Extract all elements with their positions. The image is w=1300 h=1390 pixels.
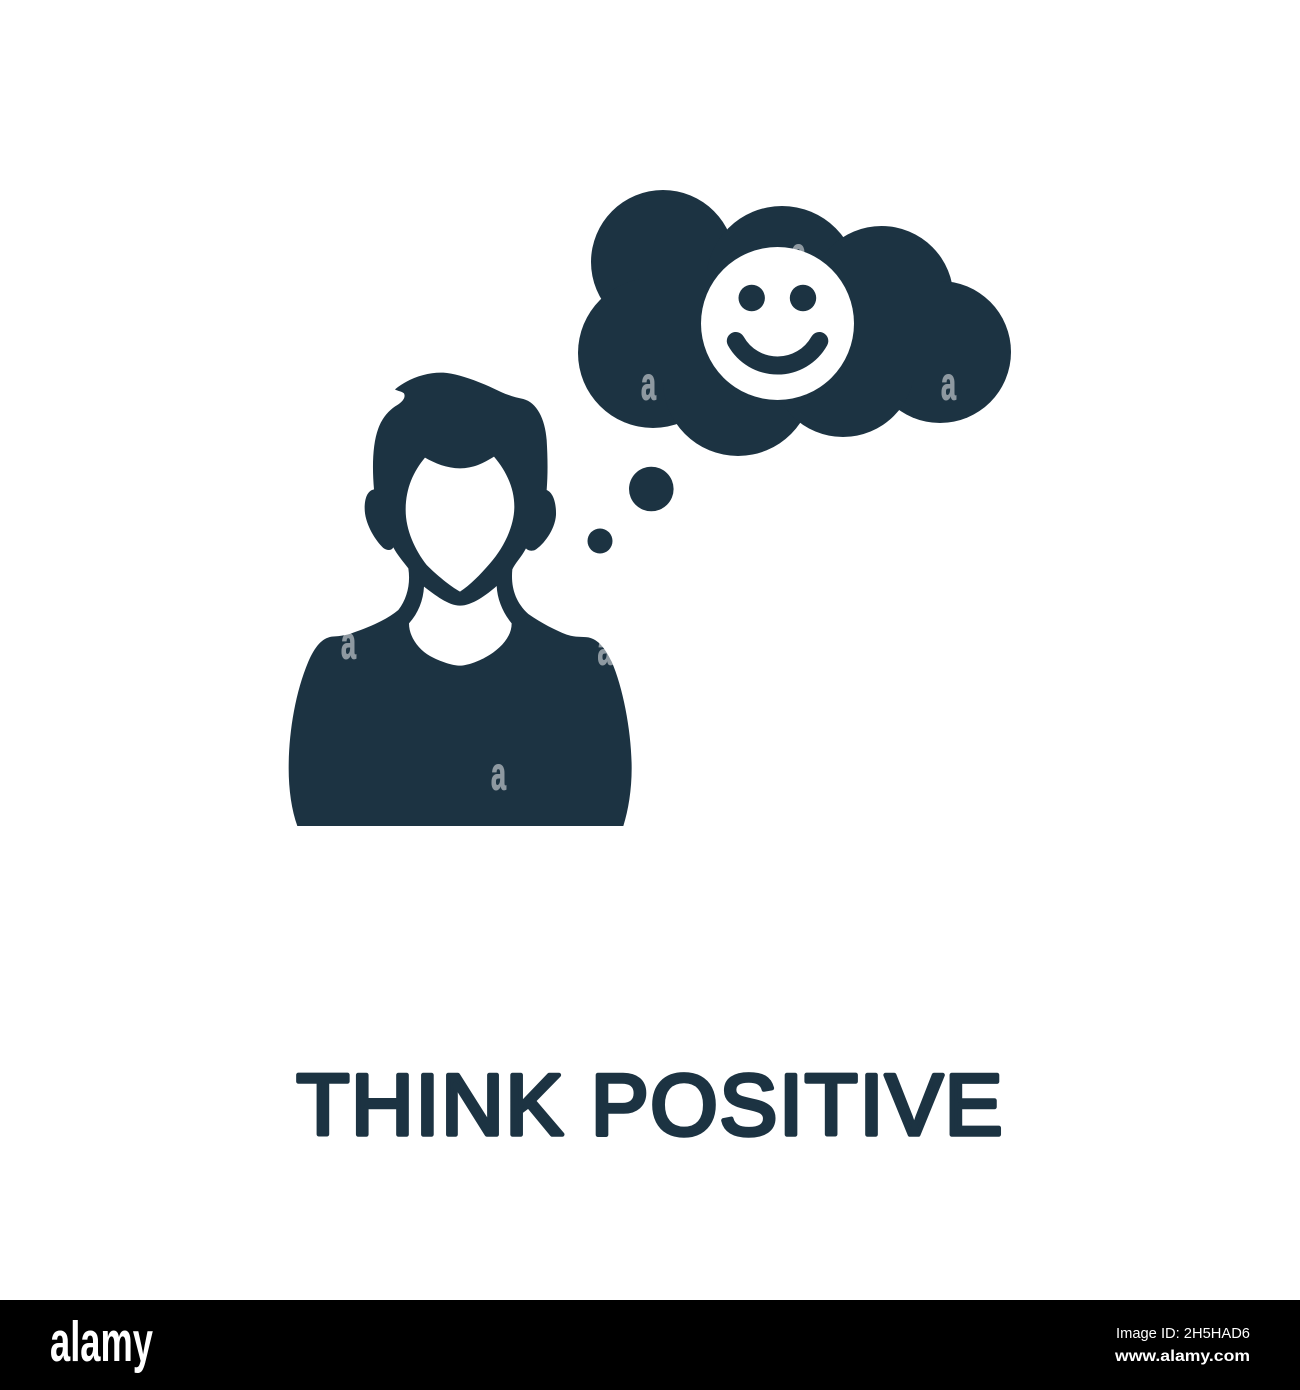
- icon: thought cloud with smiley: [578, 190, 1011, 456]
- icon: thought bubble large dot: [629, 467, 674, 511]
- smiley face: [701, 247, 854, 400]
- watermark marks on person: a: [341, 616, 356, 668]
- watermark marks on cloud: [641, 228, 956, 410]
- watermark marks on person: [341, 616, 613, 800]
- icon: thought bubble small dot: [588, 528, 612, 554]
- watermark marks on cloud: a: [641, 358, 656, 410]
- icon: person silhouette: [289, 373, 632, 826]
- watermark marks on person: a: [598, 622, 613, 674]
- website: www.alamy.com: [1114, 1348, 1250, 1365]
- footer bar: [0, 1300, 1300, 1390]
- watermark marks on cloud: a: [941, 358, 956, 410]
- image id: Image ID: 2H5HAD6: [1116, 1325, 1250, 1342]
- title: THINK POSITIVE: [296, 1058, 1002, 1154]
- cloud shape: [578, 190, 1011, 456]
- watermark marks on cloud: a: [791, 228, 806, 280]
- footer logo: alamy: [50, 1310, 153, 1374]
- watermark marks on person: a: [491, 748, 506, 800]
